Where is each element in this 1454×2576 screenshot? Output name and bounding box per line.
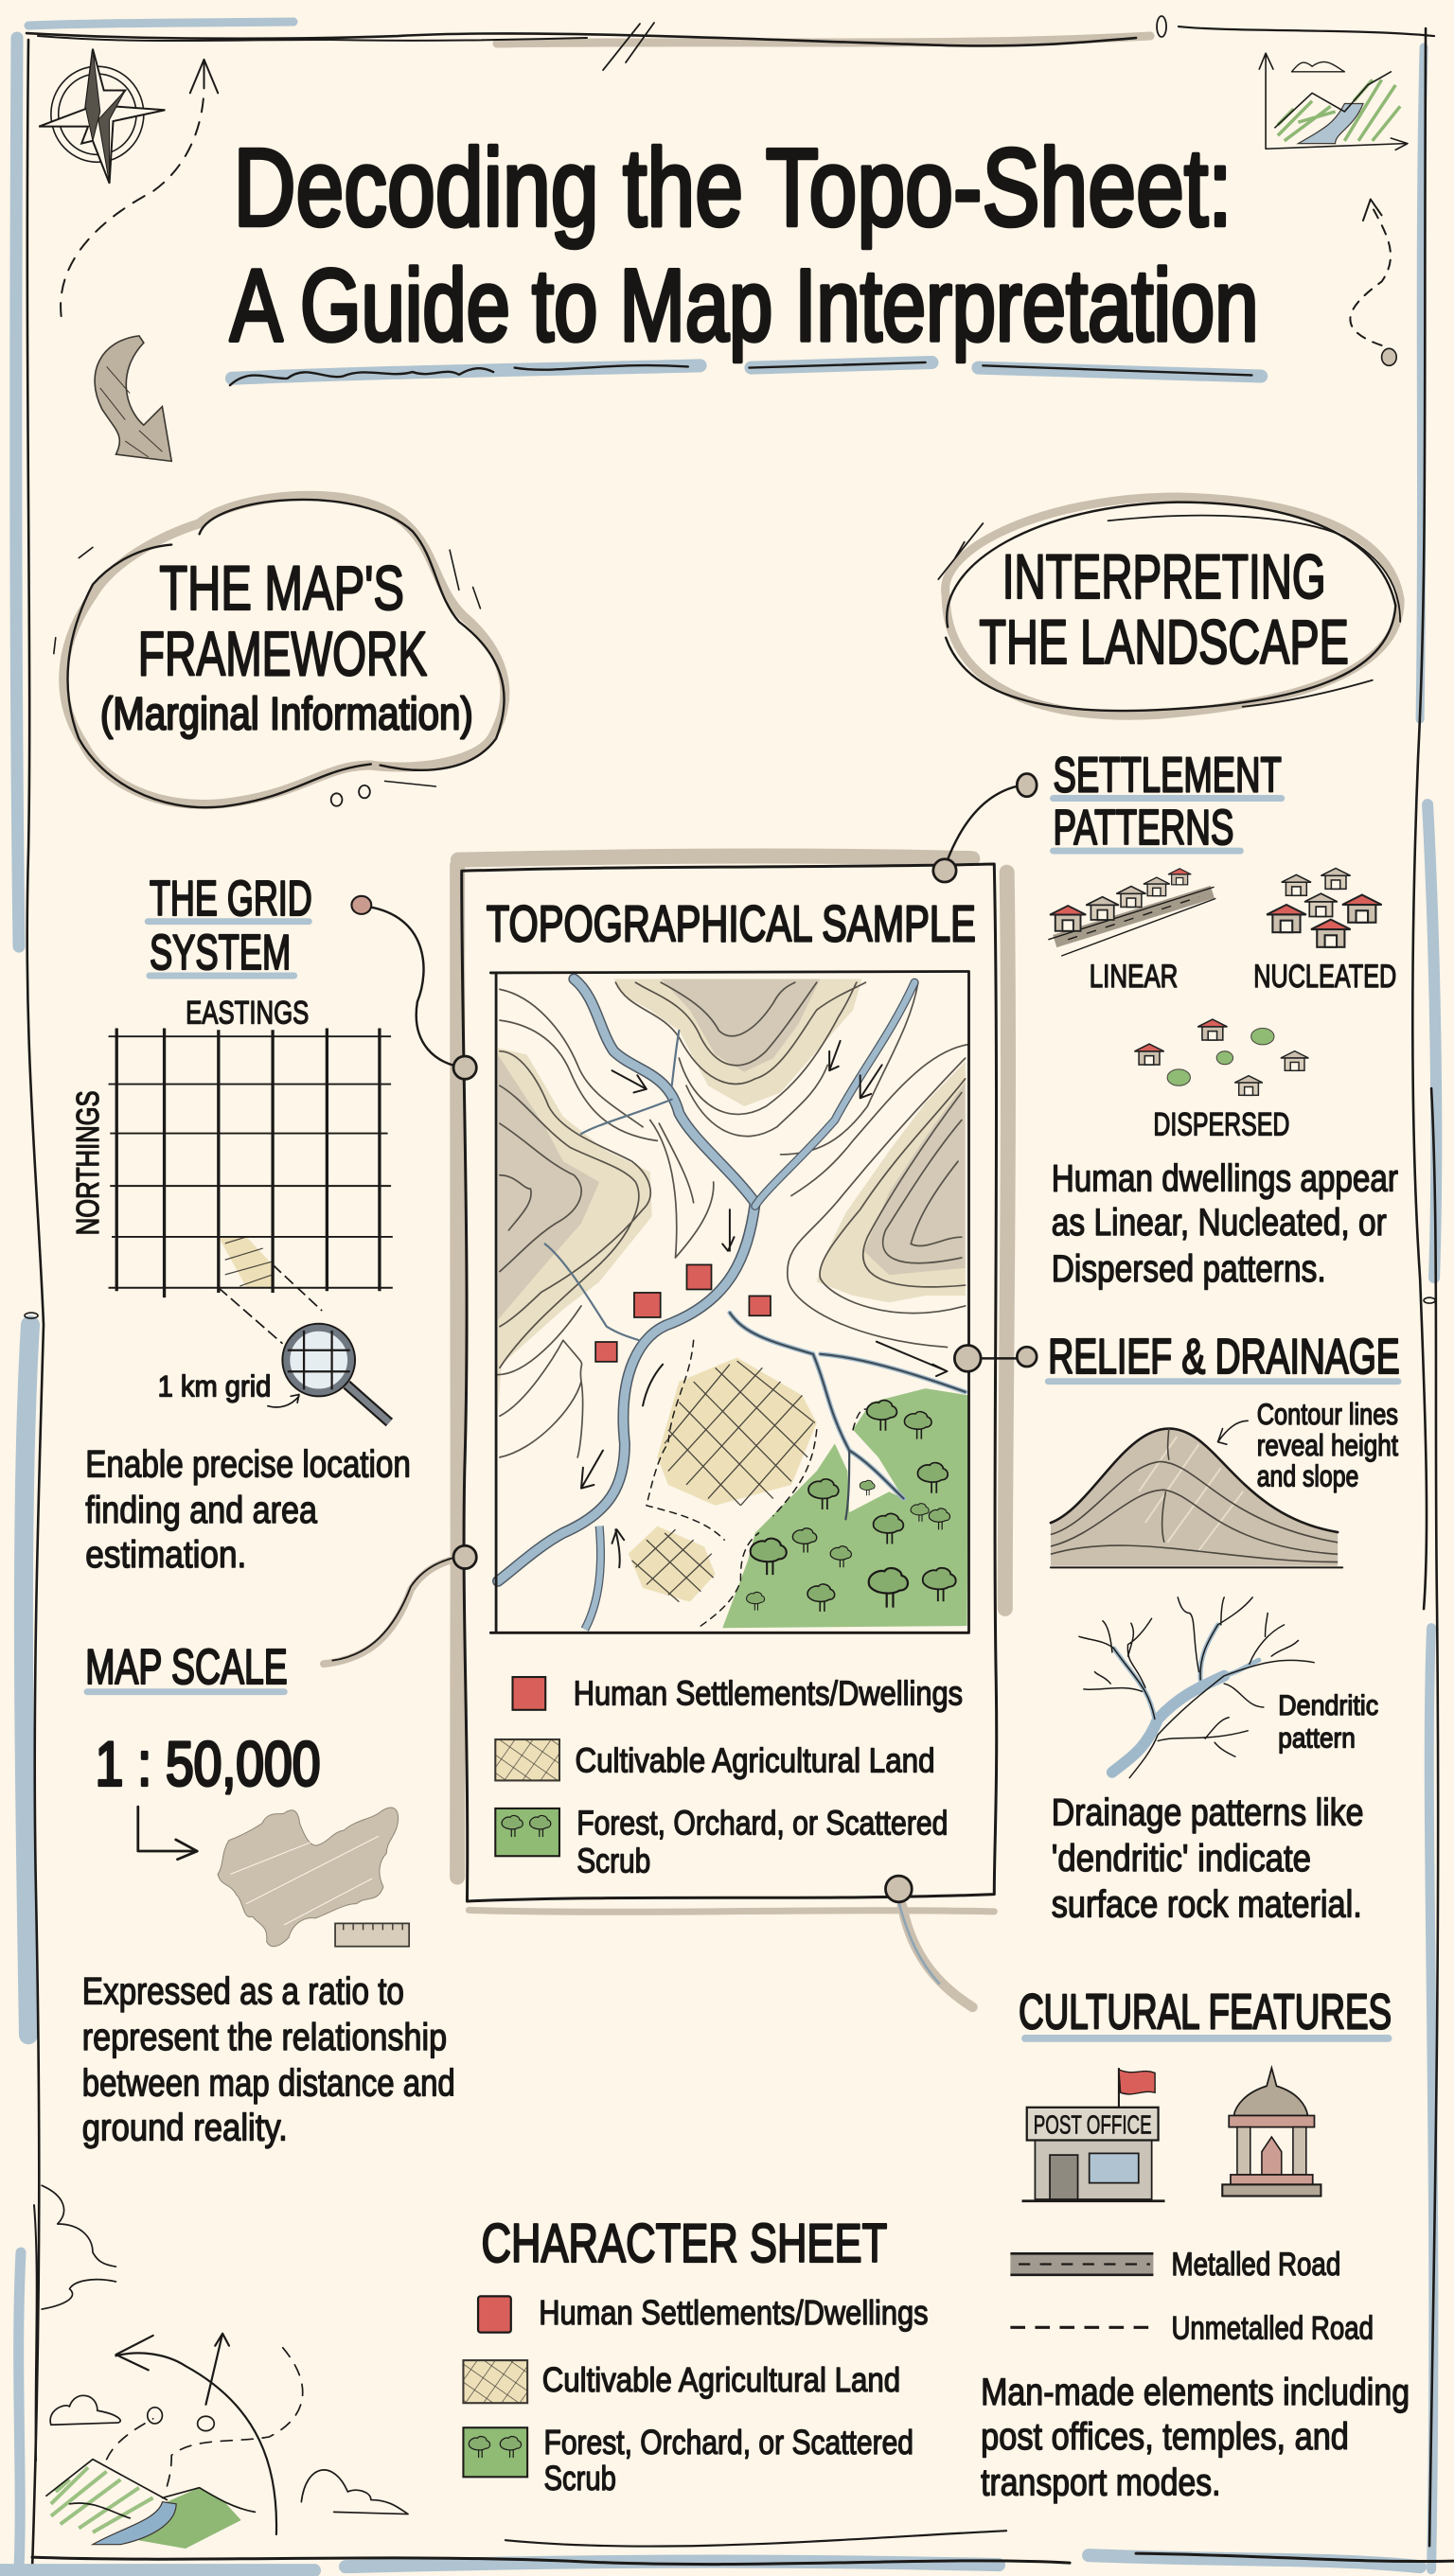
grid caption: 1 km grid <box>158 1369 271 1403</box>
hill caption: Contour lines <box>1257 1398 1398 1431</box>
section: cultural features <box>981 1985 1410 2503</box>
scale body text: ground reality. <box>82 2108 288 2149</box>
hill caption: and slope <box>1257 1460 1358 1493</box>
connector: panel to cultural <box>885 1876 972 2007</box>
eastings label: EASTINGS <box>186 995 309 1031</box>
legend: forest swatch <box>495 1808 559 1856</box>
hill caption <box>1257 1398 1398 1493</box>
terrain: hills <box>613 979 862 1106</box>
linear pattern <box>1048 869 1215 995</box>
agricultural key: Cultivable Agricultural Land <box>542 2360 900 2399</box>
settlement body text: as Linear, Nucleated, or <box>1052 1202 1387 1244</box>
grid body text: Enable precise location <box>85 1443 411 1485</box>
heading <box>1054 749 1282 856</box>
linear pattern: LINEAR <box>1090 959 1178 995</box>
icon: post office <box>1022 2068 1165 2201</box>
scale body text: represent the relationship <box>82 2017 447 2058</box>
forest key: Scrub <box>543 2459 616 2497</box>
scale body text: Expressed as a ratio to <box>82 1970 404 2012</box>
scale body text: between map distance and <box>82 2063 455 2105</box>
heading: SYSTEM <box>150 926 291 980</box>
legend: agricultural swatch <box>495 1739 559 1780</box>
bubble text: THE MAP'S <box>159 553 404 623</box>
arrow <box>138 1807 197 1860</box>
dwellings on map <box>595 1264 771 1362</box>
sketch: bottom-left landscape <box>42 2185 408 2549</box>
arrow: dashed route top right <box>1350 200 1396 365</box>
contours <box>498 982 968 1457</box>
unmetalled road: Unmetalled Road <box>1171 2311 1374 2347</box>
relief body text: surface rock material. <box>1052 1883 1362 1925</box>
forest <box>722 1388 968 1628</box>
heading <box>148 872 312 980</box>
grid body text <box>85 1443 411 1576</box>
bubble text: INTERPRETING <box>1002 541 1326 611</box>
map legend: Cultivable Agricultural Land <box>575 1741 935 1780</box>
rivers <box>498 979 755 1581</box>
agricultural key <box>463 2360 900 2403</box>
metalled road: Metalled Road <box>1171 2247 1340 2283</box>
bubble: the map's framework: (Marginal Information) <box>100 689 473 740</box>
icon: temple <box>1222 2068 1321 2197</box>
connector: panel to settlement <box>933 773 1037 882</box>
title underline <box>230 362 1261 385</box>
section: relief and drainage <box>1048 1330 1400 1925</box>
icon: region shape <box>218 1808 399 1947</box>
grid body text: estimation. <box>85 1534 246 1576</box>
section: character sheet <box>463 2214 929 2497</box>
scale body text <box>82 1970 455 2149</box>
dendritic caption <box>1278 1690 1378 1755</box>
map frame <box>490 971 968 1632</box>
connector: grid to panel <box>351 896 476 1079</box>
heading: SETTLEMENT <box>1054 749 1282 803</box>
dendritic caption: pattern <box>1278 1723 1356 1755</box>
farmland <box>657 1357 817 1506</box>
settlement body text: Dispersed patterns. <box>1052 1248 1326 1290</box>
heading: CHARACTER SHEET <box>482 2214 887 2274</box>
map legend: Human Settlements/Dwellings <box>574 1674 963 1713</box>
relief body text: Drainage patterns like <box>1052 1791 1364 1833</box>
metalled road <box>1010 2247 1340 2283</box>
map legend: Forest, Orchard, or Scattered <box>576 1804 948 1843</box>
connector: scale to panel <box>324 1545 476 1664</box>
cultural body text: post offices, temples, and <box>981 2416 1349 2458</box>
map arrows <box>581 1041 948 1567</box>
relief body text <box>1052 1791 1364 1925</box>
map legend <box>495 1674 963 1880</box>
settlement body text <box>1052 1157 1398 1290</box>
grid chart <box>109 1029 393 1344</box>
forest key: Forest, Orchard, or Scattered <box>543 2423 913 2461</box>
relief body text: 'dendritic' indicate <box>1052 1838 1311 1879</box>
bubble: the map's framework: FRAMEWORK <box>138 618 427 688</box>
chart: dendritic tree <box>1079 1597 1314 1778</box>
panel title: TOPOGRAPHICAL SAMPLE <box>487 896 976 953</box>
scale ratio: 1 : 50,000 <box>96 1729 320 1799</box>
forest key <box>463 2423 913 2497</box>
dispersed pattern <box>1134 1019 1308 1142</box>
panel frame <box>456 856 1008 1912</box>
heading: PATTERNS <box>1054 801 1233 856</box>
forest trees <box>747 1401 956 1612</box>
section: settlement patterns <box>1048 749 1398 1290</box>
bubble: the map's framework <box>54 496 505 807</box>
map tracks <box>647 1340 865 1626</box>
connector: panel to relief <box>954 1345 1037 1371</box>
chart: hill profile <box>1051 1420 1342 1567</box>
icon: magnifying glass <box>283 1324 389 1422</box>
section: the grid system <box>70 872 411 1576</box>
cultural body text: transport modes. <box>981 2461 1221 2503</box>
compass rose <box>39 49 165 184</box>
section: map scale <box>82 1640 455 2149</box>
icon: ruler <box>335 1923 409 1947</box>
arrow: dashed route top left <box>61 60 218 316</box>
settlement key: Human Settlements/Dwellings <box>539 2293 929 2332</box>
legend: settlement swatch <box>513 1677 545 1710</box>
dispersed pattern: DISPERSED <box>1153 1106 1289 1142</box>
cultural body text <box>981 2372 1410 2503</box>
map <box>490 971 968 1632</box>
nucleated pattern: NUCLEATED <box>1253 959 1396 995</box>
arrow: curved tan arrow <box>95 336 171 461</box>
icon: mini terrain chart <box>1259 53 1408 150</box>
northings label: NORTHINGS <box>70 1090 105 1235</box>
heading: THE GRID <box>150 872 312 926</box>
nucleated pattern <box>1253 868 1396 995</box>
grid body text: finding and area <box>85 1490 318 1531</box>
map legend: Scrub <box>576 1842 650 1880</box>
dendritic caption: Dendritic <box>1278 1690 1378 1721</box>
panel: topographical sample <box>456 856 1008 1912</box>
heading: MAP SCALE <box>85 1640 288 1695</box>
bubble: interpreting the landscape <box>938 497 1400 715</box>
hill caption: reveal height <box>1257 1429 1398 1462</box>
icon: post office: POST OFFICE <box>1034 2110 1152 2140</box>
title <box>230 126 1258 362</box>
